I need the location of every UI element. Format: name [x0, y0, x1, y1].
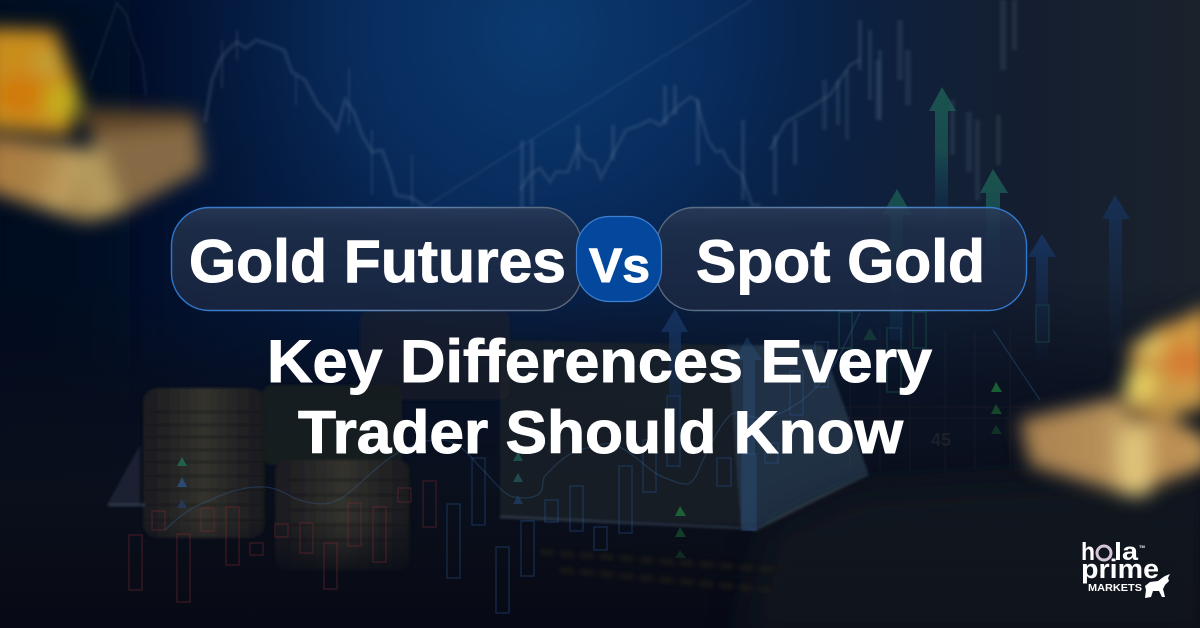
- heading: Gold Futures: Gold Futures: [189, 228, 566, 295]
- logo: hola prime markets: la: [1114, 538, 1139, 566]
- badge: Vs: [576, 216, 662, 302]
- headline: Trader Should Know: [298, 399, 903, 466]
- logo: hola prime markets: TM: [1139, 544, 1145, 549]
- arrow: blue near pill: [1028, 234, 1056, 360]
- hollow candlesticks green: [839, 305, 1049, 392]
- faint digits on table: 45: [931, 430, 951, 450]
- logo: hola prime markets: prime: [1081, 554, 1159, 584]
- silver bar: [500, 340, 868, 530]
- icon: bull: [1145, 574, 1170, 598]
- badge: Vs: Vs: [589, 240, 650, 293]
- background candlesticks right: [822, 0, 1017, 200]
- gold bars top left (blurred): [0, 28, 203, 222]
- hollow candlesticks red: [129, 481, 436, 602]
- arrow: blue right: [1102, 195, 1130, 350]
- grid on right: [820, 330, 1030, 470]
- logo: hola prime markets: MARKETS: [1088, 582, 1142, 594]
- arrow: green short right: [980, 169, 1008, 290]
- arrow: blue under heading: [661, 309, 688, 470]
- arrow: green center: [882, 189, 912, 340]
- arrow: green tall: [929, 87, 956, 220]
- headline: Key Differences Every: [267, 328, 933, 395]
- gold bars bottom right (blurred): [1020, 305, 1200, 496]
- up arrows: [177, 87, 1130, 558]
- pill: Gold Futures: [172, 208, 582, 310]
- heading: Spot Gold: Spot Gold: [696, 228, 985, 295]
- small triangles: [177, 247, 1002, 558]
- blue trend line: [165, 313, 1040, 530]
- headline: [267, 328, 933, 466]
- pill: Spot Gold: [656, 208, 1026, 310]
- dark table: [0, 470, 1200, 628]
- background line chart: [90, 0, 880, 210]
- hollow candlesticks blue: [447, 342, 828, 613]
- logo: hola prime markets: h: [1081, 538, 1095, 566]
- gold coin stacks: [107, 310, 510, 570]
- logo: hola prime markets: [1081, 538, 1170, 598]
- arrow: blue mid: [735, 337, 762, 530]
